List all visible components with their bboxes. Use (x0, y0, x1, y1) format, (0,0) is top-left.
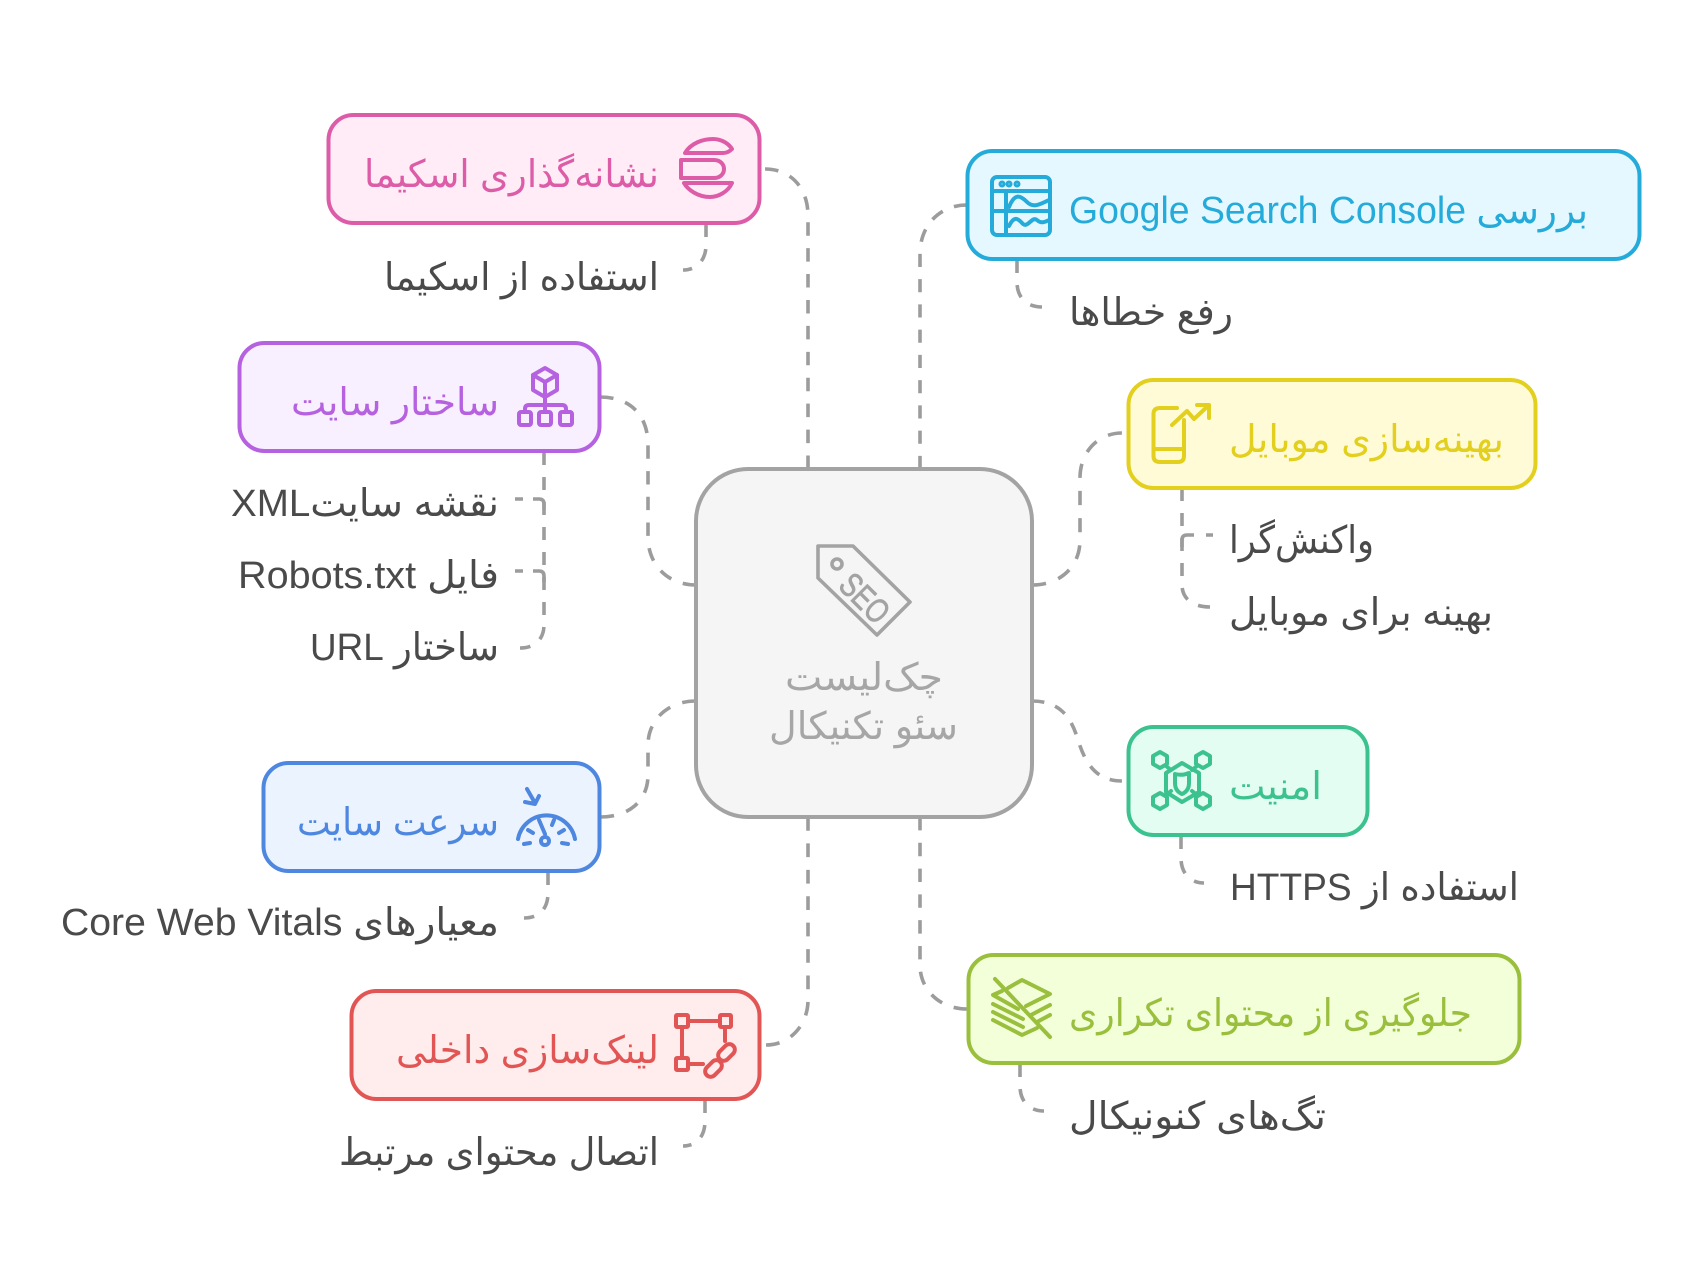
site structure heading: ساختار سایت (291, 382, 499, 424)
mobile optimization heading: بهینه‌سازی موبایل (1229, 419, 1504, 462)
connector: center to search console (920, 205, 967, 469)
connector: center to schema (765, 169, 808, 469)
panel: site structure (240, 343, 600, 451)
duplicate content heading: جلوگیری از محتوای تکراری (1069, 991, 1472, 1036)
site structure item: XML sitemap: نقشه سایتXML (231, 483, 499, 525)
connector: center to internal linking (766, 817, 808, 1045)
icon: mobile growth (1154, 405, 1209, 462)
connector: search console to item (1017, 260, 1042, 307)
panel: internal linking (352, 991, 760, 1099)
connector: center to site speed (600, 701, 696, 817)
site speed heading: سرعت سایت (297, 802, 499, 845)
site speed item: معیارهای Core Web Vitals (61, 902, 499, 944)
schema item: استفاده از اسکیما (384, 257, 659, 299)
security item: استفاده از HTTPS (1230, 867, 1519, 909)
panel: site speed (264, 763, 600, 871)
search console item: رفع خطاها (1069, 292, 1233, 335)
panel: central topic (696, 469, 1032, 817)
icon: analytics window (992, 177, 1050, 235)
icon: SEO tag (818, 546, 910, 635)
panel: duplicate content (968, 955, 1520, 1063)
central title line 1: چک‌لیست (785, 657, 943, 699)
search console heading: بررسی Google Search Console (1069, 190, 1588, 233)
central title line 2: سئو تکنیکال (769, 706, 958, 749)
mobile item: responsive: واکنش‌گرا (1229, 518, 1374, 563)
panel: search console (968, 151, 1640, 259)
duplicate content item: تگ‌های کنونیکال (1069, 1095, 1326, 1139)
panel: schema markup (328, 115, 760, 223)
connector: internal linking to item (683, 1100, 705, 1146)
connector: mobile to items (1182, 488, 1213, 607)
icon: security network (1153, 752, 1210, 809)
icon: stacked pages crossed (993, 979, 1050, 1037)
mobile item: optimized: بهینه برای موبایل (1229, 592, 1493, 635)
icon: SEO tag: SEO (831, 566, 897, 632)
connector: schema to item (683, 224, 706, 270)
site structure item: Robots.txt: فایل Robots.txt (238, 555, 499, 597)
internal linking heading: لینک‌سازی داخلی (396, 1030, 659, 1072)
connector: center to site structure (600, 397, 696, 585)
icon: speedometer (518, 789, 575, 845)
connector: center to duplicate content (920, 817, 967, 1009)
connector: site structure to items (515, 452, 544, 648)
panel: mobile optimization (1128, 380, 1536, 488)
icon: link (676, 1015, 737, 1079)
connector: site speed to item (524, 872, 548, 918)
connector: center to security (1032, 701, 1122, 781)
schema heading: نشانه‌گذاری اسکیما (364, 152, 659, 196)
connector: security to item (1181, 836, 1204, 883)
connector: center to mobile (1032, 433, 1122, 585)
security heading: امنیت (1229, 766, 1322, 808)
icon: schema (681, 139, 732, 197)
panel: security (1128, 727, 1368, 835)
icon: site structure (519, 368, 572, 425)
site structure item: URL: ساختار URL (310, 627, 499, 669)
connector: duplicate content to item (1020, 1064, 1044, 1111)
internal linking item: اتصال محتوای مرتبط (339, 1132, 659, 1175)
